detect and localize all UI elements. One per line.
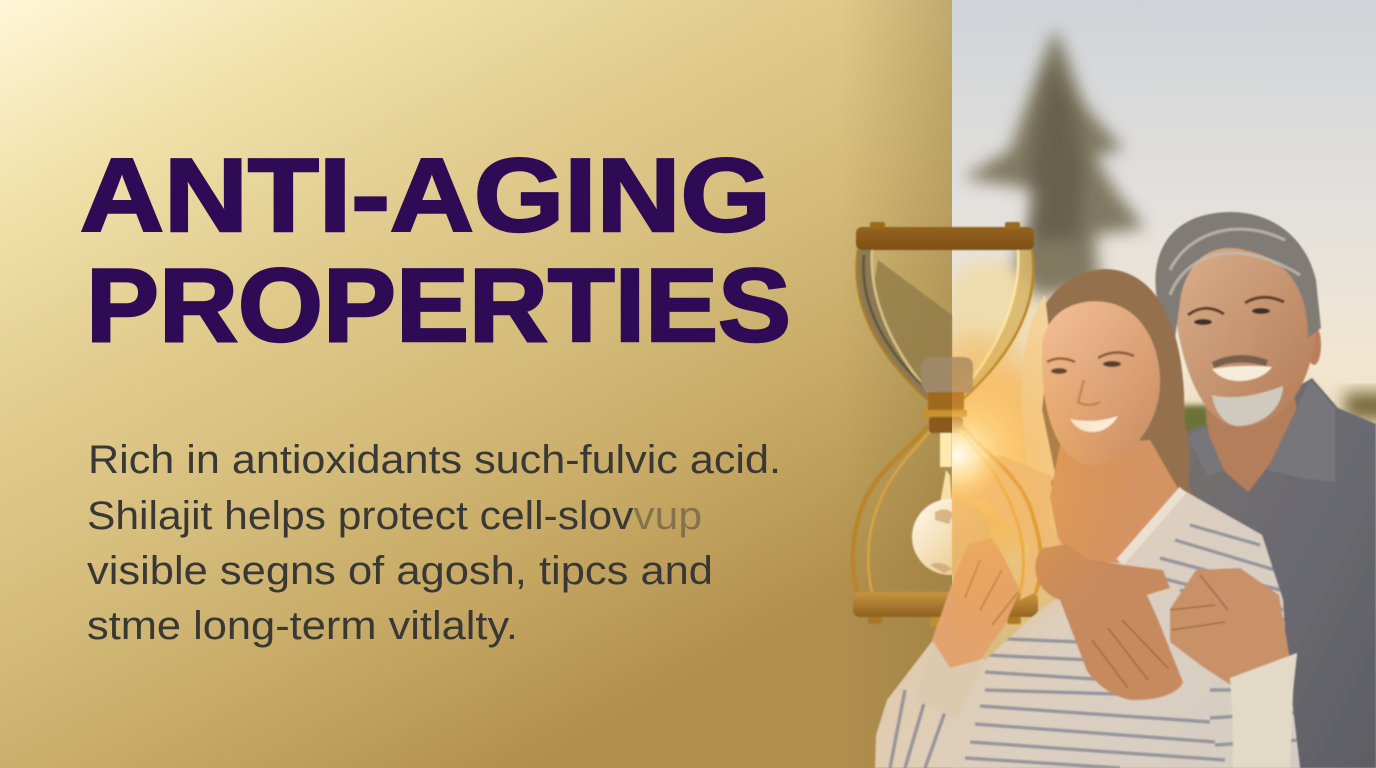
icon: hourglass [853,222,1038,627]
title: ANTI-AGING [80,138,771,254]
woman: face [1042,301,1160,465]
panel: gold background [0,0,952,768]
panel shadow behind hourglass [840,0,952,768]
man: second hand and cuff [1170,568,1297,768]
woman: brows and eyes [1047,352,1134,374]
bottom bar [853,592,1038,617]
body text: Rich in antioxidants such-fulvic acid. [88,438,781,482]
man: hair highlights [1170,229,1300,295]
hourglass: lower right curves over knit [960,427,1041,592]
top bolts [870,222,1020,229]
body text: stme long-term vitlalty. [87,604,518,648]
woman: striped sweater [875,490,1300,768]
glass bulbs [855,250,933,400]
woman: sleeve cuff [915,640,985,720]
woman: neck [1050,440,1180,563]
man: eyes and brows [1188,297,1284,325]
title: PROPERTIES [86,248,791,364]
man: neck [1205,385,1300,492]
woman: smile [1070,416,1118,432]
upper sand cap [921,357,973,393]
top bar [856,227,1034,250]
body text [87,438,781,648]
photo: couple [875,212,1376,768]
globe [912,499,990,575]
man: face [1174,232,1316,427]
man: shirt [1180,378,1376,768]
man: nose and moustache [1212,320,1268,368]
body text: visible segns of agosh, tipcs and [87,549,713,593]
woman: hand holding hourglass [932,538,1020,668]
man: collar [1187,380,1335,482]
man: ear [1307,325,1321,365]
photo: sunset sky background [945,0,1376,768]
man: hair [1155,212,1321,345]
bright sun flare at divider [952,412,1000,492]
woman: sunlit hair [1021,295,1056,490]
bottom bolts and foot [868,617,1021,627]
man: smile [1212,366,1272,381]
falling light stem [940,433,952,467]
man: grey beard [1212,386,1283,426]
woman: nose [1078,380,1100,405]
body text: Shilajit helps protect cell-slov vup [87,494,702,538]
woman: glowing knit upper arm [952,455,1072,600]
woman: hair [1021,269,1192,494]
title [80,138,791,364]
warm light wash over left of couple [952,326,1112,618]
man: arm and hand over shoulder [1035,544,1183,700]
dark sand wedge in top bulb [874,260,953,380]
neck collar [923,410,967,417]
sun glow behind hourglass [952,333,1054,554]
